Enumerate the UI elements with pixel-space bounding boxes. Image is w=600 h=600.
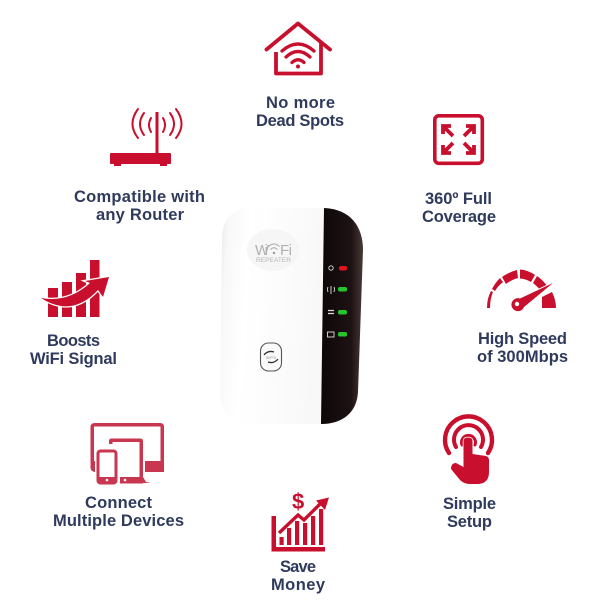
device status lights — [328, 266, 347, 337]
icon: signal bars with arrow — [41, 260, 109, 317]
icon: monitor tablet phone — [90, 423, 164, 484]
label: 360 full coverage: 360º Full — [425, 190, 492, 208]
label: compatible with any router: any Router — [96, 206, 185, 224]
label: connect multiple devices: Connect — [85, 494, 152, 512]
device wifi logo: Wi — [255, 242, 270, 259]
label: compatible with any router: Compatible with — [74, 188, 205, 206]
icon: tapping finger — [445, 416, 492, 484]
icon: house with wifi — [266, 24, 330, 74]
device wps button: WPS — [266, 355, 276, 360]
device wps button — [260, 343, 282, 371]
device wifi logo: REPEATER — [256, 257, 291, 264]
label: 360 full coverage — [422, 190, 496, 226]
label: save money: Save — [280, 558, 316, 576]
label: connect multiple devices — [53, 494, 184, 530]
label: no more dead spots: No more — [266, 94, 335, 112]
item: compatible with any router — [74, 109, 205, 224]
label: connect multiple devices: Multiple Devices — [53, 512, 184, 530]
label: boosts wifi signal: WiFi Signal — [30, 350, 117, 368]
label: high speed of 300mbps: of 300Mbps — [477, 348, 568, 366]
repeater device — [220, 208, 363, 424]
icon: expand arrows — [435, 116, 482, 163]
label: simple setup: Setup — [447, 513, 492, 531]
label: no more dead spots: Dead Spots — [256, 112, 344, 130]
label: simple setup — [443, 495, 496, 531]
label: high speed of 300mbps — [477, 330, 568, 366]
icon: router — [110, 109, 182, 166]
item: simple setup — [443, 416, 496, 531]
device wifi logo: Fi — [280, 242, 292, 259]
item: save money — [271, 489, 329, 594]
item: connect multiple devices — [53, 423, 184, 530]
item: 360 full coverage — [422, 116, 496, 226]
label: high speed of 300mbps: High Speed — [478, 330, 567, 348]
label: save money: Money — [271, 576, 326, 594]
icon: dollar sign: $ — [292, 489, 304, 514]
label: boosts wifi signal: Boosts — [47, 332, 100, 350]
label: boosts wifi signal — [30, 332, 117, 368]
device wifi logo — [247, 229, 299, 271]
icon: speedometer — [487, 270, 556, 311]
label: no more dead spots — [256, 94, 344, 130]
label: save money — [271, 558, 326, 594]
item: boosts wifi signal — [30, 260, 117, 368]
label: compatible with any router — [74, 188, 205, 224]
device black side panel — [321, 208, 363, 424]
item: high speed of 300mbps — [477, 270, 568, 366]
item: no more dead spots — [256, 24, 344, 130]
label: simple setup: Simple — [443, 495, 496, 513]
label: 360 full coverage: Coverage — [422, 208, 496, 226]
